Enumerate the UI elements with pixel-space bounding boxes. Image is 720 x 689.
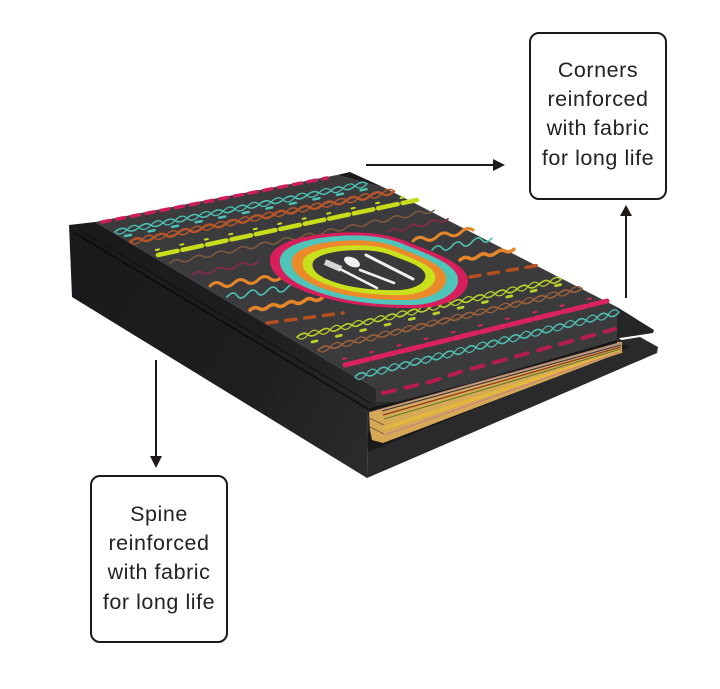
printed cover [95, 175, 617, 402]
spine [69, 222, 378, 478]
icon: cutlery [325, 254, 413, 288]
top corner [337, 172, 385, 188]
pattern rows [102, 178, 619, 393]
medallion [270, 232, 468, 308]
callout: spine: Spine [130, 502, 188, 526]
arrow: up to corners box [620, 205, 632, 298]
band under cover [368, 340, 617, 412]
callout: corners: reinforced [547, 87, 649, 111]
callout: spine: for long life [103, 590, 215, 614]
right corner [617, 307, 654, 340]
callout: spine [91, 476, 227, 642]
arrow: to corners box [366, 159, 505, 171]
pages [369, 342, 622, 443]
callout: spine: reinforced [108, 531, 210, 555]
book [69, 172, 658, 478]
arrow: down to spine box [150, 360, 162, 468]
bottom cover [367, 337, 658, 478]
callout: spine: with fabric [107, 560, 210, 584]
callout: corners: Corners [558, 58, 638, 82]
callout: corners [530, 33, 666, 199]
callout: corners: with fabric [546, 116, 649, 140]
callout: corners: for long life [542, 146, 654, 170]
